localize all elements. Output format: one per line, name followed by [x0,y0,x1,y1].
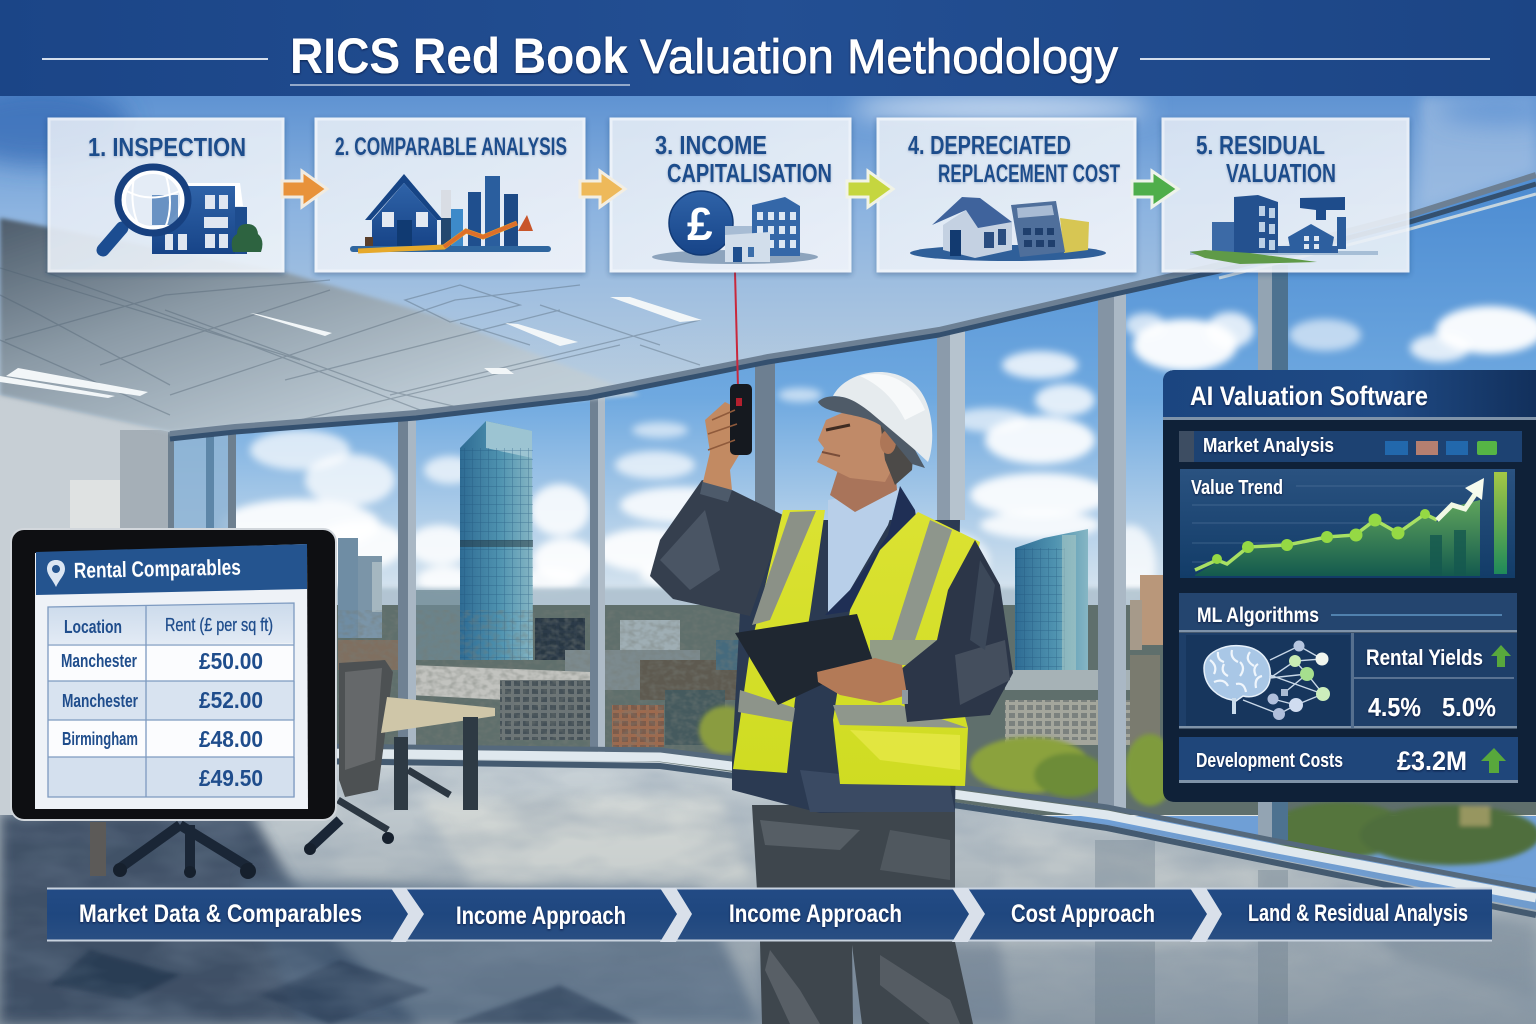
upper-right sky through glass [1420,96,1536,208]
rental yields: Rental Yields [1366,645,1483,670]
window mullions [398,265,1288,840]
title text: RICS Red Book [290,28,628,84]
window head beam [170,175,1536,439]
chart bars [1430,530,1466,576]
tablet header: Rental Comparables [74,555,241,583]
clipboard hand [817,658,908,704]
floor [0,752,1536,1024]
tower left [460,421,533,660]
chart: value trend: Value Trend [1191,477,1283,499]
horizon haze [230,588,1230,610]
panel header: AI Valuation Software [1190,381,1428,411]
window sill [235,745,1536,915]
rental yields: 5.0% [1442,692,1496,722]
comparables table: Location [64,617,122,637]
panel header [1163,370,1536,420]
icon: house and rising chart [350,174,551,252]
development costs: £3.2M [1397,746,1467,776]
banner labels [79,900,1468,930]
market analysis bar: Market Analysis [1203,435,1334,457]
ceiling [0,96,1536,432]
trend line [1195,514,1437,570]
ML neural network panel [1179,633,1517,728]
banner bar [47,888,1492,941]
shirt [828,488,900,612]
banner labels: Income Approach [729,900,902,928]
interior wall and glass partition [0,390,236,815]
sky [0,96,1536,816]
title underline [290,84,630,86]
icon: pound coin and buildings [652,191,818,264]
development costs: Development Costs [1196,750,1343,772]
icon: pound coin and buildings: £ [687,198,713,250]
comparables table: Birmingham [62,729,138,749]
rental yields: 4.5% [1368,692,1421,722]
tower right [1015,529,1088,670]
icon: magnifier over building [103,167,262,254]
neck and face [817,405,915,512]
hard hat [818,372,932,468]
city base [230,605,1536,815]
title banner [0,0,1536,96]
approach chevron banner [47,888,1492,942]
market analysis bar [1179,431,1522,462]
raised arm [650,480,785,616]
icon: buildings, house and crane [1190,195,1378,264]
banner labels: Market Data & Comparables [79,900,362,928]
banner labels: Land & Residual Analysis [1248,900,1468,927]
step 5 heading: VALUATION [1226,158,1336,188]
banner labels: Cost Approach [1011,900,1155,928]
rental yields [1354,645,1514,722]
ML algorithms header: ML Algorithms [1197,604,1319,627]
dark ceiling reflection [0,218,640,432]
hi-vis vest [733,510,980,786]
arrow 3 to 4 [847,171,893,207]
step 5 heading: 5. RESIDUAL [1196,130,1325,160]
comparables table: Manchester [62,691,138,711]
step 2 heading: 2. COMPARABLE ANALYSIS [335,133,567,161]
tablet body [11,529,336,820]
mid-rise buildings [410,640,1160,775]
title rules [42,58,1490,60]
banner edges [47,888,1492,940]
clipboard [735,614,873,705]
icon: location pin [47,560,65,587]
comparables table: £48.00 [199,726,263,752]
comparables table: £50.00 [199,648,263,674]
development costs [1179,737,1518,783]
comparables table: £49.50 [199,765,263,791]
step 4 heading: REPLACEMENT COST [938,160,1120,188]
right arm [900,540,1013,722]
surveyor figure [650,372,1013,1024]
city texture [338,610,758,750]
ML algorithms header [1179,593,1517,632]
chart: value trend [1180,469,1515,578]
arrow 4 to 5 [1132,171,1178,207]
distant skyline [338,538,1164,690]
step 1 heading: 1. INSPECTION [88,132,246,162]
tablet: rental comparables [11,529,336,820]
jacket torso [732,520,960,813]
ceiling lights [0,297,702,398]
arrow 1 to 2 [282,171,327,207]
icon: house, calculator and bricks [910,197,1106,261]
arrow 2 to 3 [580,171,625,207]
sky glow at top [0,85,1536,165]
desk and chair [90,660,495,879]
AI valuation software panel [1163,370,1536,802]
step 3 card: income capitalisation [611,119,850,271]
jacket collar [825,486,918,615]
comparables table: Manchester [61,651,137,671]
chart area [1195,500,1480,576]
laser beam [735,272,738,388]
step 5 card: residual valuation [1163,119,1408,271]
comparables table: £52.00 [199,687,263,713]
step 3 heading [655,130,832,188]
tablet header [36,544,307,595]
chevron separators [391,888,1222,942]
step 4 card: depreciated replacement cost [878,119,1135,271]
ceiling tile grid [0,268,700,420]
step 1 card: inspection [49,119,283,271]
icon: brain [1204,646,1270,714]
trousers [752,805,973,1024]
clouds [220,306,1536,605]
icon: node network [1243,640,1330,720]
comparables table [48,603,295,797]
banner labels: Income Approach [456,902,626,930]
step 3 heading: 3. INCOME [655,130,767,160]
jacket hem facets [800,770,955,812]
trees [699,706,1536,865]
step 3 heading: CAPITALISATION [667,158,832,188]
floor mottling [0,760,1536,1024]
step 5 heading [1196,130,1336,188]
panel body [1163,370,1536,802]
tablet screen [35,544,308,809]
step 4 heading [908,130,1120,188]
icon: up arrow [1491,645,1511,667]
icon: up arrow [1481,748,1506,773]
device hand [703,384,752,490]
comparables table: Rent (£ per sq ft) [165,615,273,635]
step 4 heading: 4. DEPRECIATED [908,130,1071,160]
step 2 card: comparable analysis [316,119,584,271]
title text [290,28,1118,84]
title text: Valuation Methodology [640,31,1118,84]
